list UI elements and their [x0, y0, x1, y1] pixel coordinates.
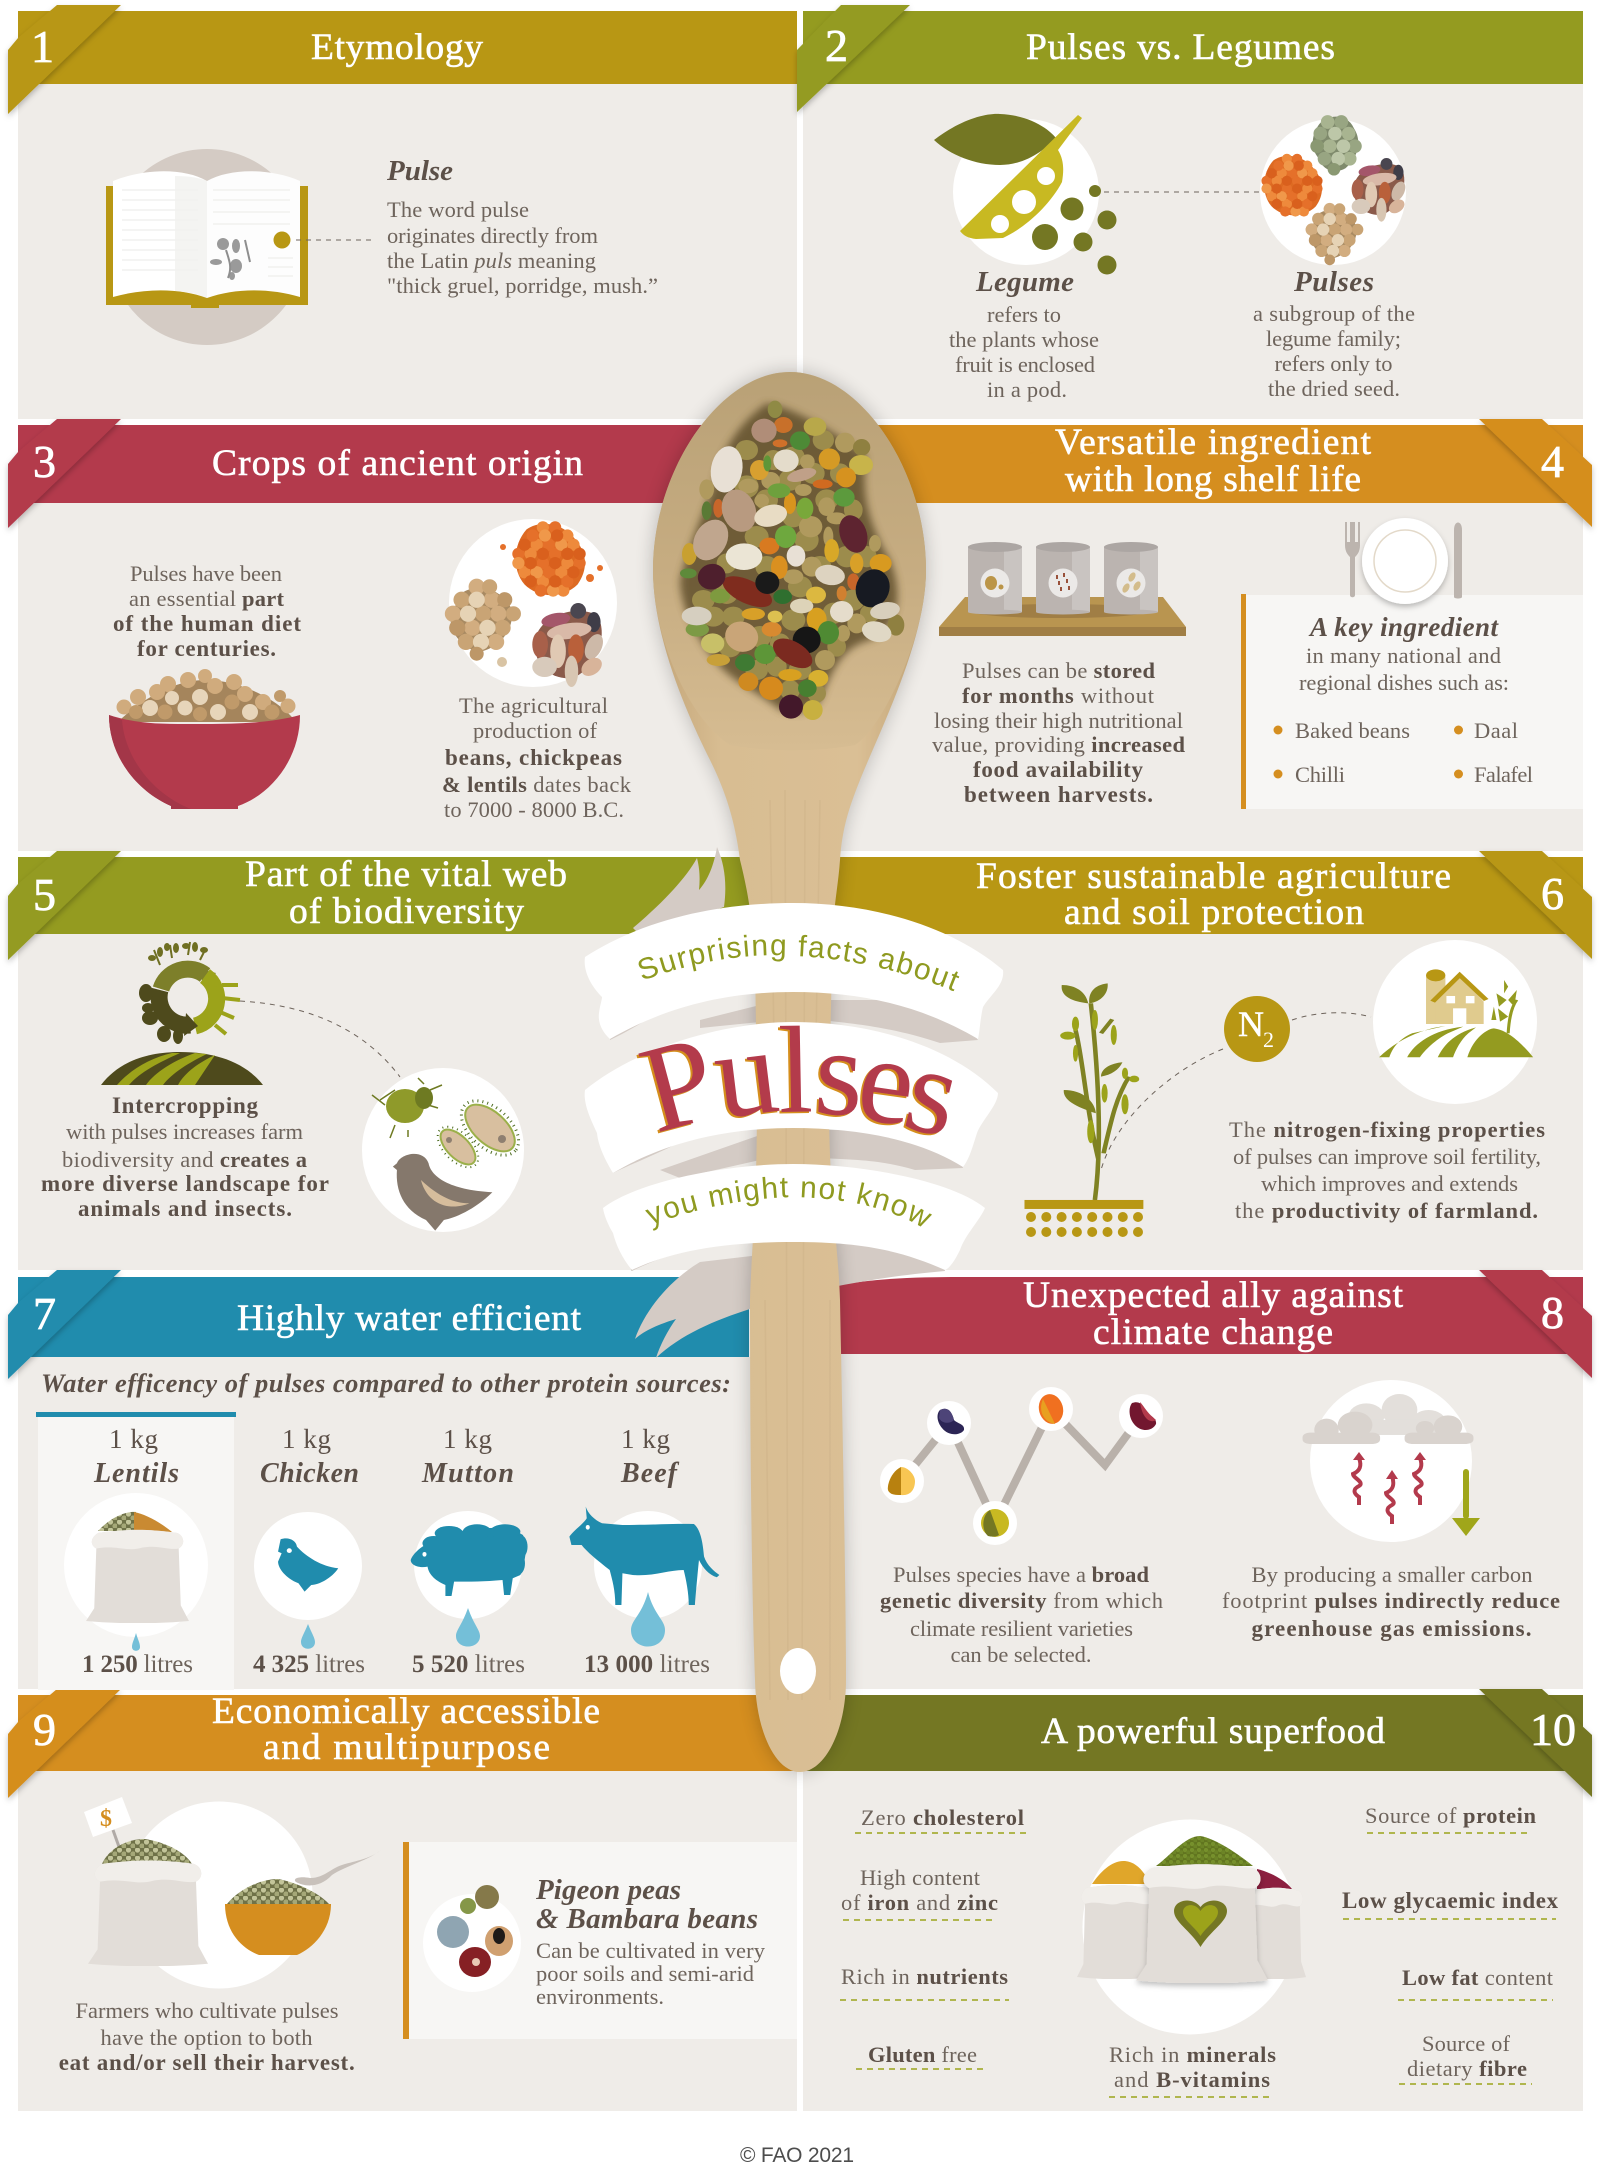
text: agricultural production: beans, chickpeas	[445, 745, 622, 770]
section numbers: 4	[1541, 436, 1564, 487]
chart: genetic diversity network	[880, 1387, 1163, 1545]
text: Pulses: a subgroup of the	[1253, 301, 1415, 326]
text: storage: value, providing increased	[932, 732, 1185, 757]
panel: pigeon peas: environments.	[536, 1984, 664, 2009]
heading: Crops of ancient origin: Crops of ancient origin	[212, 443, 583, 484]
soil dots	[1026, 1212, 1143, 1237]
panel: key ingredient: Chilli	[1295, 762, 1345, 787]
text: Pulse definition: the Latin puls meaning	[387, 248, 596, 273]
icon: three sacks with heart	[1077, 1820, 1306, 2034]
section numbers	[31, 20, 1576, 1755]
label: low fat: Low fat content	[1402, 1965, 1554, 1990]
text: Pulses: legume family;	[1266, 326, 1401, 351]
heading: Pulses vs. Legumes: Pulses vs. Legumes	[1026, 27, 1335, 68]
column: beef	[569, 1424, 719, 1678]
heading: Foster sustainable agriculture	[976, 856, 1451, 933]
text: carbon footprint: footprint pulses indirectly reduce	[1222, 1588, 1560, 1613]
text: agricultural production: & lentils dates back	[442, 772, 632, 797]
text: intercropping: more diverse landscape for	[41, 1171, 329, 1196]
panel: key ingredient: Daal	[1474, 718, 1518, 743]
panel: economics background	[18, 1771, 797, 2111]
text: farmers: eat and/or sell their harvest.	[59, 2050, 355, 2075]
text: storage	[932, 658, 1185, 807]
heading: Part of the vital web: Part of the vital web	[245, 854, 567, 895]
panel: pigeon peas: Pigeon peas	[535, 1874, 681, 1906]
header bar 1	[8, 5, 797, 114]
icon: biodiversity cycle	[139, 942, 240, 1044]
dashed connector intercropping	[240, 1001, 400, 1077]
section numbers: 6	[1541, 868, 1564, 919]
text: nitrogen fixing: The nitrogen-fixing properties	[1229, 1117, 1545, 1142]
text: carbon footprint: By producing a smaller carbon	[1252, 1562, 1532, 1587]
text: Legume	[949, 266, 1099, 402]
text: intercropping: Intercropping	[112, 1093, 258, 1118]
panel: lentils column	[36, 1412, 236, 1690]
text: intercropping: with pulses increases farm	[66, 1119, 303, 1144]
icon: clouds and emissions	[1303, 1380, 1480, 1542]
heading: Part of the vital web	[245, 854, 567, 932]
section numbers: 1	[31, 21, 54, 72]
panel: key ingredient: Baked beans	[1295, 718, 1410, 743]
dashed connector plant to N2	[1101, 1049, 1223, 1170]
column: beef: 13 000 litres	[584, 1651, 710, 1678]
icon: dried pulses	[1260, 115, 1408, 265]
text: Pulse definition: "thick gruel, porridge, mush.”	[387, 273, 658, 298]
text: human diet: an essential part	[129, 586, 284, 611]
text: carbon footprint: greenhouse gas emissions.	[1252, 1616, 1532, 1641]
header bar 2	[797, 5, 1583, 112]
label: iron and zinc	[841, 1865, 998, 1920]
header bar 5	[8, 851, 797, 960]
panel: key ingredient: Falafel	[1474, 762, 1533, 787]
icon: plant with soil	[1024, 983, 1143, 1209]
column: mutton: Mutton	[421, 1458, 514, 1489]
panel: superfood background	[803, 1771, 1583, 2111]
text: Pulses: refers only to	[1274, 351, 1392, 376]
label: protein: Source of protein	[1365, 1803, 1536, 1828]
header bar 6	[803, 851, 1592, 959]
dashed connector	[296, 239, 376, 241]
section numbers: 5	[33, 869, 56, 920]
icon: farm	[1373, 940, 1537, 1104]
icon: open book	[106, 149, 308, 345]
header bar 8	[838, 1270, 1592, 1378]
heading: Economically accessible: and multipurpose	[263, 1727, 550, 1768]
column: mutton: 1 kg	[443, 1424, 492, 1454]
icon: lentils chickpeas beans circle	[445, 519, 617, 687]
text: farmers: Farmers who cultivate pulses	[76, 1998, 338, 2023]
icon: striped hill	[101, 1052, 263, 1085]
panel: biodiversity background	[18, 934, 797, 1270]
column: mutton: 5 520 litres	[412, 1651, 525, 1678]
panel: pigeon peas	[403, 1842, 797, 2039]
text: Legume: the plants whose	[949, 327, 1099, 352]
section numbers: 2	[825, 20, 848, 71]
label: glycaemic index: Low glycaemic index	[1342, 1888, 1558, 1913]
text: Pulse definition: Pulse	[386, 155, 453, 187]
text: agricultural production: production of	[473, 718, 598, 743]
panel: key ingredient: A key ingredient	[1308, 612, 1499, 642]
section numbers: 9	[33, 1704, 56, 1755]
wooden spoon	[653, 372, 926, 1772]
icon: N2 molecule: 2	[1263, 1027, 1274, 1052]
panel: lentils column: 1 250 litres	[82, 1651, 193, 1678]
text: Legume: Legume	[975, 266, 1074, 298]
ribbon tails behind spoon	[610, 847, 978, 1358]
text: Pulses	[1253, 266, 1415, 401]
column: chicken: Chicken	[260, 1458, 359, 1489]
label: fibre: Source of	[1422, 2031, 1510, 2056]
heading: Part of the vital web: of biodiversity	[289, 891, 524, 932]
label: nutrients: Rich in nutrients	[841, 1964, 1008, 1989]
text: genetic diversity: Pulses species have a broad	[893, 1562, 1149, 1587]
text: storage: Pulses can be stored	[962, 658, 1155, 683]
icon: N2 molecule	[1224, 996, 1290, 1062]
text: nitrogen fixing: which improves and extends	[1261, 1171, 1518, 1196]
banner: Surprising facts about: Surprising facts about	[638, 934, 960, 992]
dashed connector legume to pulses	[1104, 191, 1262, 193]
dashed connector N2 to farm	[1292, 1013, 1371, 1020]
panel: lentils column: Lentils	[93, 1458, 179, 1489]
icon: plate with fork and knife	[1345, 518, 1462, 604]
text: human diet: for centuries.	[137, 636, 276, 661]
column: chicken: 4 325 litres	[253, 1651, 365, 1678]
text: Legume: in a pod.	[987, 377, 1067, 402]
column: mutton	[411, 1424, 528, 1678]
label: gluten free: Gluten free	[868, 2042, 977, 2067]
panel: soil background	[803, 934, 1583, 1270]
header bar 9	[8, 1689, 797, 1798]
icon: sack with price flag and bowl: $	[100, 1806, 112, 1832]
text: Pulse definition	[386, 155, 658, 298]
heading: Economically accessible	[212, 1691, 600, 1768]
panel: crops background	[18, 503, 797, 851]
panel: climate background	[803, 1354, 1583, 1689]
panel: pigeon peas: & Bambara beans	[536, 1903, 758, 1935]
text: agricultural production: to 7000 - 8000 B.C.	[444, 797, 624, 822]
text: Pulses: Pulses	[1293, 266, 1374, 298]
icon: legume pod	[934, 114, 1116, 274]
icon: insect, microbes and bird	[362, 1068, 529, 1232]
column: beef: 1 kg	[621, 1424, 670, 1454]
text: genetic diversity	[880, 1562, 1163, 1667]
banner: you might not know	[603, 1164, 985, 1270]
heading: Unexpected ally: Unexpected ally against	[1023, 1275, 1404, 1316]
text: storage: food availability	[973, 757, 1144, 782]
text: storage: losing their high nutritional	[934, 708, 1183, 733]
text: intercropping: animals and insects.	[78, 1196, 292, 1221]
text: Pulses: the dried seed.	[1268, 376, 1400, 401]
text: human diet: of the human diet	[113, 611, 301, 636]
heading: A powerful superfood: A powerful superfood	[1041, 1711, 1385, 1752]
heading: Versatile ingredient: with long shelf life	[1065, 459, 1361, 500]
label: zero cholesterol: Zero cholesterol	[861, 1805, 1024, 1830]
heading: Economically accessible: Economically accessible	[212, 1691, 600, 1732]
heading: Versatile ingredient	[1055, 422, 1372, 500]
text: water subtitle: Water efficency of pulses compared to other protein sources:	[41, 1368, 731, 1398]
column: chicken	[253, 1424, 365, 1678]
header bar 3	[8, 419, 797, 528]
text: farmers: have the option to both	[100, 2025, 312, 2050]
text: Pulse definition: originates directly from	[387, 223, 598, 248]
text: genetic diversity: genetic diversity from which	[880, 1588, 1163, 1613]
icon: sack with price flag and bowl	[84, 1797, 382, 1988]
text: Pulse definition: The word pulse	[387, 197, 529, 222]
panel: pulses vs legumes background	[803, 84, 1583, 419]
text: storage: between harvests.	[964, 782, 1153, 807]
heading: Etymology: Etymology	[311, 27, 483, 68]
banner: you might not know: you might not know	[645, 1176, 932, 1231]
column: chicken: 1 kg	[282, 1424, 331, 1454]
text: intercropping	[41, 1093, 329, 1221]
banner: Pulses title: Pulses	[628, 1001, 973, 1164]
header bar 10	[803, 1689, 1592, 1797]
text: nitrogen fixing: of pulses can improve soil fertility,	[1233, 1144, 1541, 1169]
text: genetic diversity: climate resilient varieties	[910, 1616, 1133, 1641]
heading: Versatile ingredient: Versatile ingredient	[1055, 422, 1372, 463]
text: agricultural production	[442, 693, 632, 822]
heading: Highly water efficient: Highly water efficient	[237, 1298, 582, 1339]
header bar 7	[8, 1270, 749, 1379]
label: iron and zinc: High content	[860, 1865, 981, 1890]
panel: pigeon peas: Can be cultivated in very	[536, 1938, 766, 1963]
icon: bowl of chickpeas	[109, 669, 300, 809]
text: carbon footprint	[1222, 1562, 1560, 1641]
panel: key ingredient	[1241, 594, 1583, 809]
text: nitrogen fixing: the productivity of farmland.	[1235, 1198, 1538, 1223]
heading: Foster sustainable agriculture: Foster sustainable agriculture	[976, 856, 1451, 897]
section numbers: 10	[1530, 1704, 1576, 1755]
text: nitrogen fixing	[1229, 1117, 1545, 1223]
column: beef: Beef	[620, 1458, 680, 1489]
photo: mixed beans in spoon	[680, 401, 904, 720]
text: storage: for months without	[962, 683, 1155, 708]
panel: key ingredient: regional dishes such as:	[1299, 670, 1509, 695]
text: agricultural production: The agricultural	[459, 693, 608, 718]
icon: N2 molecule: N	[1238, 1004, 1264, 1044]
panel: pigeon peas: poor soils and semi-arid	[536, 1961, 754, 1986]
heading: Unexpected ally	[1023, 1275, 1404, 1353]
label: iron and zinc: of iron and zinc	[841, 1890, 998, 1915]
label: minerals: and B-vitamins	[1114, 2067, 1270, 2092]
banner: Surprising facts about	[584, 903, 1003, 1039]
panel: versatile background	[803, 503, 1583, 851]
icon: cans on shelf	[939, 542, 1186, 636]
label: fibre	[1399, 2031, 1532, 2084]
label: minerals: Rich in minerals	[1109, 2042, 1276, 2067]
label: fibre: dietary fibre	[1407, 2056, 1527, 2081]
text: human diet	[113, 561, 301, 661]
panel: water background	[18, 1357, 797, 1689]
section numbers: 7	[33, 1288, 56, 1339]
text: farmers	[59, 1998, 355, 2075]
text: intercropping: biodiversity and creates a	[62, 1147, 307, 1172]
text: Legume: fruit is enclosed	[955, 352, 1095, 377]
section numbers: 8	[1541, 1287, 1564, 1338]
heading: Foster sustainable agriculture: and soil protection	[1064, 892, 1364, 933]
section numbers: 3	[33, 436, 56, 487]
header bar 4	[803, 419, 1592, 527]
text: genetic diversity: can be selected.	[950, 1642, 1092, 1667]
panel: lentils column: 1 kg	[109, 1424, 158, 1454]
panel: etymology background	[18, 84, 797, 419]
panel: key ingredient: in many national and	[1306, 643, 1501, 668]
text: human diet: Pulses have been	[130, 561, 282, 586]
heading: Unexpected ally: climate change	[1093, 1312, 1333, 1353]
text: Legume: refers to	[987, 302, 1061, 327]
label: minerals	[1109, 2042, 1276, 2097]
